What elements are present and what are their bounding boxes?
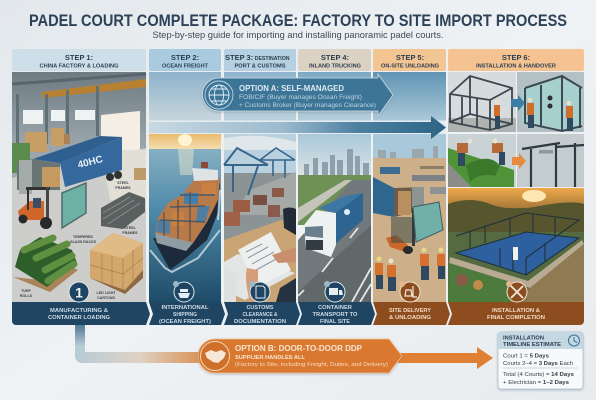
long blue arrow — [149, 116, 446, 139]
icon: badge 3 document — [249, 281, 270, 302]
labels in scene — [20, 181, 138, 300]
forklift — [18, 187, 52, 229]
workers — [375, 248, 445, 291]
band: step 3 — [224, 302, 300, 325]
band: step 2: INTERNATIONAL — [162, 305, 209, 311]
header: step 3: STEP 3: — [225, 53, 253, 62]
bottom step bands — [12, 302, 584, 325]
boxes behind container — [25, 128, 70, 152]
panel: step 1 factory scene — [12, 72, 146, 302]
band: step 3: CLEARANCE & — [242, 312, 278, 318]
band: step 6: FINAL COMPLETION — [487, 315, 545, 321]
steel frames stack — [101, 192, 145, 229]
band: step 5: & UNLOADING — [389, 315, 431, 321]
header: step 2 — [149, 49, 221, 71]
labels in scene: ROLLS — [20, 294, 33, 298]
header: step 3: DESTINATION — [255, 56, 290, 62]
labels in scene: TEMPERED — [73, 235, 93, 239]
band: step 2 — [149, 302, 225, 325]
option B badge — [198, 339, 402, 373]
header: step 1: STEP 1: — [65, 53, 93, 62]
band: step 2: SHIPPING — [173, 312, 197, 318]
band: step 1 — [12, 302, 150, 325]
timeline estimate card — [498, 332, 583, 389]
header: step 6: STEP 6: — [502, 53, 530, 62]
band: step 4: FINAL SITE — [320, 319, 350, 325]
band: step 6 — [448, 302, 584, 325]
header: step 1 — [12, 49, 146, 71]
glass racks — [62, 183, 86, 228]
header: step 5 — [373, 49, 446, 71]
panel: step 6 glass installation — [517, 72, 584, 132]
band: step 3: DOCUMENTATION — [234, 319, 286, 325]
option A arrow badge: FOB/CIF (Buyer manages Ocean Freight) — [239, 95, 362, 101]
panel: step 4 inland trucking — [298, 72, 371, 302]
arrow: frame to glass — [511, 95, 525, 111]
container 40HC: 40HC — [77, 154, 104, 171]
header: step 3 — [224, 49, 296, 71]
icon: badge 5 forklift — [399, 281, 420, 302]
icon: badge 4 truck — [324, 281, 345, 302]
panel: step 6 frame erection — [448, 72, 516, 132]
turf rolls — [13, 237, 78, 292]
header: step 5: ON-SITE UNLOADING — [381, 64, 439, 70]
option B arrow to timeline — [398, 347, 493, 369]
band: step 3: CUSTOMS — [246, 305, 274, 311]
subtitle: Step-by-step guide for importing and installing panoramic padel courts. — [152, 30, 444, 41]
header: step 4: INLAND TRUCKING — [309, 64, 361, 70]
header: step 6: INSTALLATION & HANDOVER — [476, 64, 556, 70]
timeline estimate card: INSTALLATION — [503, 336, 544, 342]
panel: step 2 ocean freight — [149, 72, 221, 302]
step headers — [12, 49, 584, 71]
header: step 5: STEP 5: — [396, 53, 424, 62]
icon: badge 1 — [69, 282, 89, 302]
band: step 6: INSTALLATION & — [492, 308, 540, 314]
band: step 4: TRANSPORT TO — [312, 312, 358, 318]
panel: step 5 on-site unloading — [373, 72, 446, 302]
band: step 1: MANUFACTURING & — [50, 308, 108, 314]
forklift and glass — [386, 202, 443, 254]
icon: badge 2 ship — [173, 281, 194, 302]
panel: step 3 port and customs — [224, 72, 296, 302]
icon: badge 1: 1 — [75, 284, 83, 300]
site materials — [380, 166, 446, 194]
labels in scene: STEEL — [124, 226, 137, 230]
city skyline — [304, 149, 369, 177]
cartons pallet — [90, 233, 143, 294]
panel: step 6 turf laying — [448, 134, 516, 187]
option A band — [149, 74, 446, 139]
icon: clock — [568, 335, 580, 346]
container unloading — [373, 177, 424, 217]
arrow: turf to lights — [512, 153, 526, 169]
labels in scene: STEEL — [117, 181, 130, 185]
band: step 5: SITE DELIVERY — [389, 308, 431, 314]
stacked containers — [224, 188, 284, 226]
band: step 1: CONTAINER LOADING — [48, 315, 110, 321]
container ship — [153, 162, 220, 270]
icon: badge 6 tools — [506, 281, 527, 302]
labels in scene: CARTONS — [97, 296, 115, 300]
labels in scene: GLASS RACKS — [70, 240, 97, 244]
band: step 4: CONTAINER — [318, 305, 352, 311]
header: step 3: PORT & CUSTOMS — [234, 64, 286, 70]
option B connector — [75, 325, 205, 363]
white divider strip behind long arrow — [149, 120, 446, 134]
icon: globe — [205, 81, 233, 109]
labels in scene: FRAMES — [122, 231, 138, 235]
header: step 2: STEP 2: — [171, 53, 199, 62]
icon: handshake — [200, 342, 230, 370]
option A arrow badge: OPTION A: SELF-MANAGED — [239, 83, 344, 93]
labels in scene: FRAMES — [115, 186, 131, 190]
labels in scene: LED LIGHT — [97, 291, 116, 295]
timeline estimate card: TIMELINE ESTIMATE — [503, 342, 561, 348]
port cranes — [224, 148, 295, 195]
option B badge: (Factory to Site, including Freight, Duties, and Delivery) — [235, 362, 388, 368]
panel: step 6 finished court at sunset — [448, 188, 584, 302]
header: step 2: OCEAN FREIGHT — [162, 64, 209, 70]
artwork panels — [12, 72, 584, 302]
header: step 4: STEP 4: — [321, 53, 349, 62]
delivery truck — [304, 193, 363, 257]
step number badges — [69, 281, 527, 302]
band: step 4 — [298, 302, 375, 325]
timeline estimate card: Court 1 = 5 Days — [503, 354, 549, 360]
header: step 6 — [448, 49, 584, 71]
band: step 2: (OCEAN FREIGHT) — [159, 319, 211, 325]
timeline estimate card: Total (4 Courts) = 14 Days — [503, 372, 574, 378]
container 40HC — [17, 136, 122, 194]
band: step 5 — [373, 302, 450, 325]
option B badge: SUPPLIER HANDLES ALL — [235, 355, 306, 361]
header: step 4 — [298, 49, 371, 71]
option B badge: OPTION B: DOOR-TO-DOOR DDP — [235, 344, 363, 353]
panel: step 6 lighting — [517, 134, 584, 187]
option A arrow badge: + Customs Broker (Buyer manages Clearance) — [239, 103, 376, 109]
labels in scene: TURF — [21, 289, 32, 293]
timeline estimate card: + Electrician = 1–2 Days — [503, 380, 569, 386]
timeline estimate card: Courts 2–4 = 3 Days Each — [503, 361, 573, 367]
option A arrow badge — [203, 74, 393, 116]
header: step 1: CHINA FACTORY & LOADING — [40, 64, 118, 70]
desk and documents — [224, 208, 296, 302]
small step 6 arrows — [511, 95, 526, 169]
